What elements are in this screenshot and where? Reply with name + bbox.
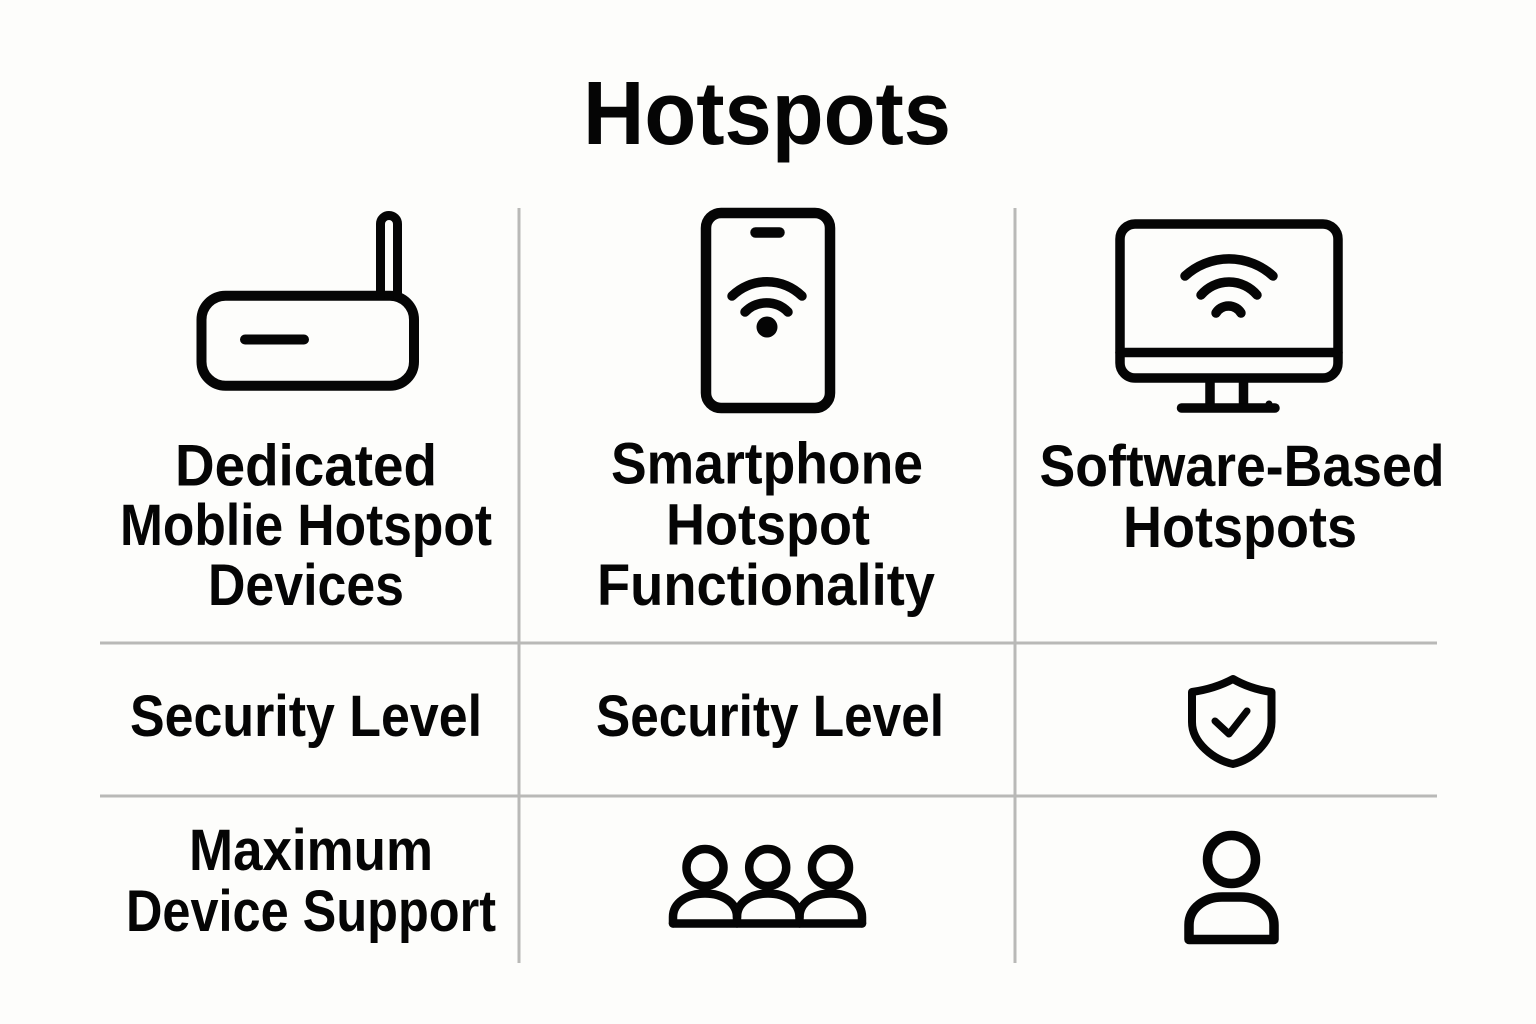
heading: smartphone hotspot functionality: Functionality xyxy=(597,553,935,618)
heading: smartphone hotspot functionality xyxy=(597,432,935,618)
heading: dedicated mobile hotspot devices: Dedicated xyxy=(175,434,437,498)
heading: dedicated mobile hotspot devices: Devices xyxy=(208,553,404,618)
row label: maximum device support: Device Support xyxy=(126,879,496,944)
icon: smartphone with wifi xyxy=(706,213,830,408)
row label: security level column 2: Security Level xyxy=(596,684,944,749)
heading: software-based hotspots xyxy=(1040,434,1444,560)
title: Hotspots xyxy=(583,64,951,164)
row label: security level column 1: Security Level xyxy=(130,684,482,749)
heading: software-based hotspots: Software-Based xyxy=(1040,434,1444,499)
row label: maximum device support: Maximum xyxy=(189,818,433,883)
heading: software-based hotspots: Hotspots xyxy=(1123,495,1357,560)
icon: single user xyxy=(1189,836,1274,940)
icon: desktop monitor with wifi xyxy=(1120,224,1338,408)
row label: maximum device support xyxy=(126,818,496,944)
heading: smartphone hotspot functionality: Hotspot xyxy=(666,492,870,558)
heading: dedicated mobile hotspot devices: Moblie Hotspot xyxy=(120,493,492,558)
icon: three users xyxy=(673,849,862,924)
icon: shield with check xyxy=(1192,679,1272,764)
heading: dedicated mobile hotspot devices xyxy=(120,434,492,618)
heading: smartphone hotspot functionality: Smartphone xyxy=(611,432,923,496)
icon: router xyxy=(202,216,414,386)
